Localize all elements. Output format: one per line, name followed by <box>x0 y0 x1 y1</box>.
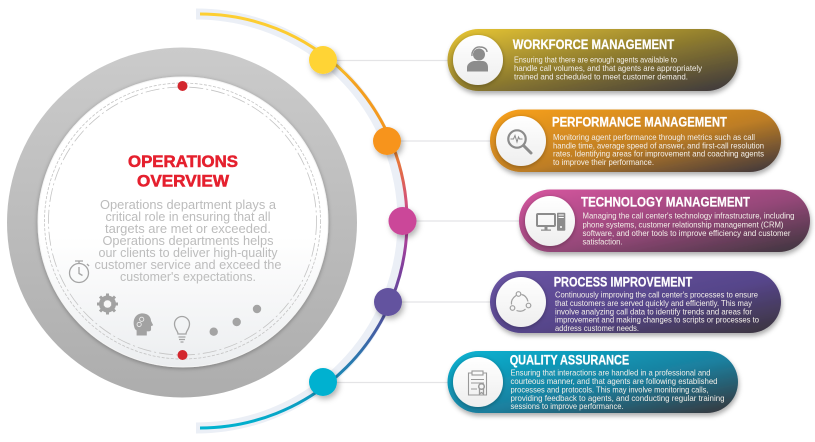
icon: process cycle <box>510 292 531 311</box>
overview text block: Operations department plays a <box>100 197 277 212</box>
description: providing feedback to agents, and conducting regular training <box>510 394 725 403</box>
description: Monitoring agent performance through metrics such as call <box>553 133 755 142</box>
panel: performance management <box>490 110 781 172</box>
overview text block <box>94 197 282 284</box>
heading: PROCESS IMPROVEMENT <box>554 275 693 290</box>
icon: desktop computer <box>537 213 565 231</box>
connector lines <box>330 60 521 382</box>
description: processes and protocols. This may involve monitoring calls, <box>510 386 708 395</box>
description: Ensuring that interactions are handled in a professional and <box>510 369 711 378</box>
description: address customer needs. <box>555 324 639 333</box>
heading: TECHNOLOGY MANAGEMENT <box>581 195 751 210</box>
panel: quality assurance <box>448 351 738 413</box>
icon: certificate clipboard <box>468 371 486 395</box>
description: Ensuring that there are enough agents available to <box>514 55 677 64</box>
icon: magnifier with pulse <box>508 130 531 153</box>
heading: OVERVIEW <box>137 172 230 190</box>
red marker top <box>178 81 188 91</box>
icon: head with gears <box>134 313 153 335</box>
panel: process improvement <box>490 271 781 333</box>
icon: light bulb <box>174 316 190 342</box>
outer timeline arc <box>196 14 407 428</box>
heading: PERFORMANCE MANAGEMENT <box>552 115 728 130</box>
description: trained and scheduled to meet customer demand. <box>514 72 688 81</box>
description <box>555 291 759 333</box>
description: satisfaction. <box>582 237 622 246</box>
description <box>582 212 795 246</box>
description <box>514 55 703 81</box>
overview text block: customer's expectations. <box>120 269 256 284</box>
heading <box>128 152 238 190</box>
red marker bottom <box>178 350 188 360</box>
overview text block: our clients to deliver high-quality <box>98 245 278 260</box>
description: rates. Identifying areas for improvement and coaching agents <box>553 150 764 159</box>
description: involve analyzing call data to identify trends and areas for <box>555 307 752 316</box>
description: Continuously improving the call center's processes to ensure <box>555 291 758 300</box>
timeline node: teal <box>309 368 337 396</box>
overview text block: critical role in ensuring that all <box>106 209 271 224</box>
description: to improve their performance. <box>553 158 654 167</box>
dashed inner rings <box>44 83 320 359</box>
white disc <box>38 77 328 367</box>
timeline node: yellow <box>309 46 337 74</box>
gray ring <box>7 48 357 398</box>
description: handle call volumes, and that agents are appropriately <box>514 64 703 73</box>
description: Managing the call center's technology infrastructure, including <box>582 212 795 221</box>
description <box>510 369 725 411</box>
heading: WORKFORCE MANAGEMENT <box>513 37 675 52</box>
description: that customers are served quickly and efficiently. This may <box>555 299 753 308</box>
description: phone systems, customer relationship management (CRM) <box>582 220 784 229</box>
description: improvement and making changes to scripts or processes to <box>555 316 759 325</box>
timeline node: orange <box>373 127 401 155</box>
central circle panel <box>7 48 357 398</box>
description: sessions to improve performance. <box>510 402 624 411</box>
icon: gear <box>97 294 118 314</box>
timeline node: purple <box>374 288 402 316</box>
panel: workforce management <box>448 29 738 91</box>
decorative dots <box>210 305 261 336</box>
heading: QUALITY ASSURANCE <box>510 352 629 367</box>
description: software, and other tools to improve efficiency and customer <box>582 229 791 238</box>
description: courteous manner, and that agents are following established <box>510 377 718 386</box>
timeline node: magenta <box>388 207 416 235</box>
overview text block: Operations departments helps <box>102 233 274 248</box>
panel: technology management <box>519 190 810 252</box>
icon: agent headset <box>467 47 488 72</box>
overview text block: targets are met or exceeded. <box>105 221 271 236</box>
icon: stopwatch <box>70 261 89 282</box>
description: handle time, average speed of answer, and first-call resolution <box>553 141 764 150</box>
overview text block: customer service and exceed the <box>94 257 282 272</box>
heading: OPERATIONS <box>128 152 238 171</box>
description <box>553 133 764 167</box>
